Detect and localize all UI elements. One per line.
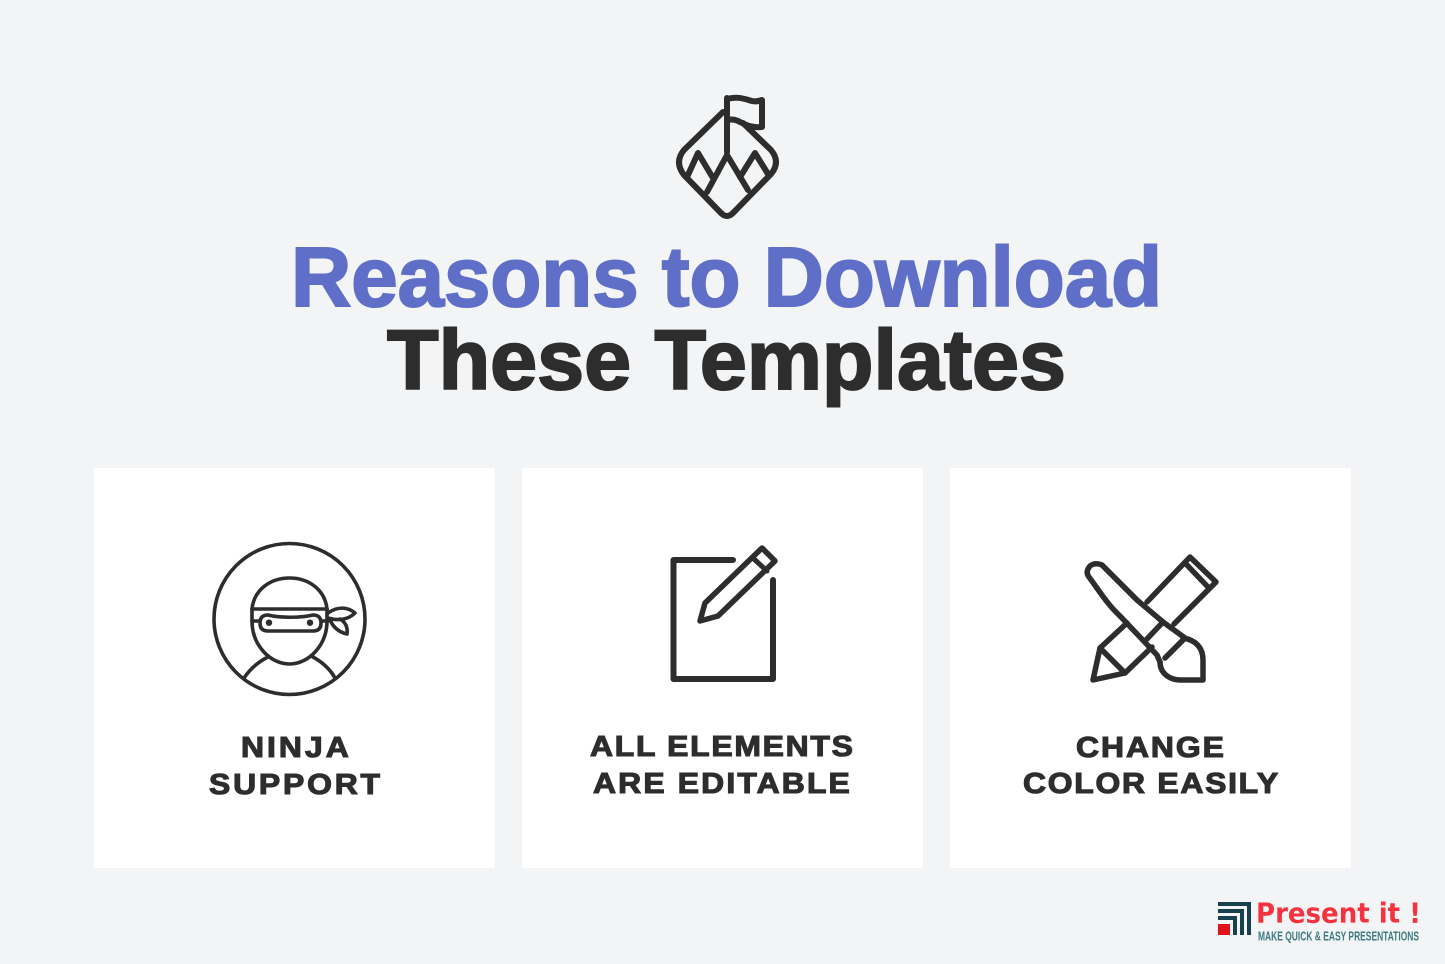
label: change color easily: COLOR EASILY	[1023, 767, 1278, 800]
label: change color easily	[1023, 731, 1278, 800]
icon: page and pencil	[674, 548, 775, 679]
label: all elements are editable: ALL ELEMENTS	[590, 730, 853, 763]
panel: ninja support	[94, 468, 495, 868]
icon: crossed pencil and brush	[1087, 557, 1216, 680]
title	[291, 230, 1162, 407]
label: all elements are editable: ARE EDITABLE	[593, 767, 850, 800]
label: ninja support: NINJA	[241, 731, 349, 764]
label: change color easily: CHANGE	[1076, 731, 1224, 764]
title line 2: These Templates	[387, 313, 1066, 407]
panel: all elements are editable	[522, 468, 923, 868]
logo: Present it	[1218, 896, 1421, 944]
logo wordmark: Present it !	[1256, 896, 1421, 930]
title line 1: Reasons to Download	[291, 230, 1162, 324]
label: all elements are editable	[590, 730, 853, 800]
icon: mountain with flag	[679, 98, 776, 216]
label: ninja support: SUPPORT	[209, 768, 380, 801]
label: ninja support	[209, 731, 380, 801]
icon: ninja	[214, 544, 365, 694]
panel: change color easily	[950, 468, 1351, 868]
icon: logo mark	[1218, 902, 1251, 935]
